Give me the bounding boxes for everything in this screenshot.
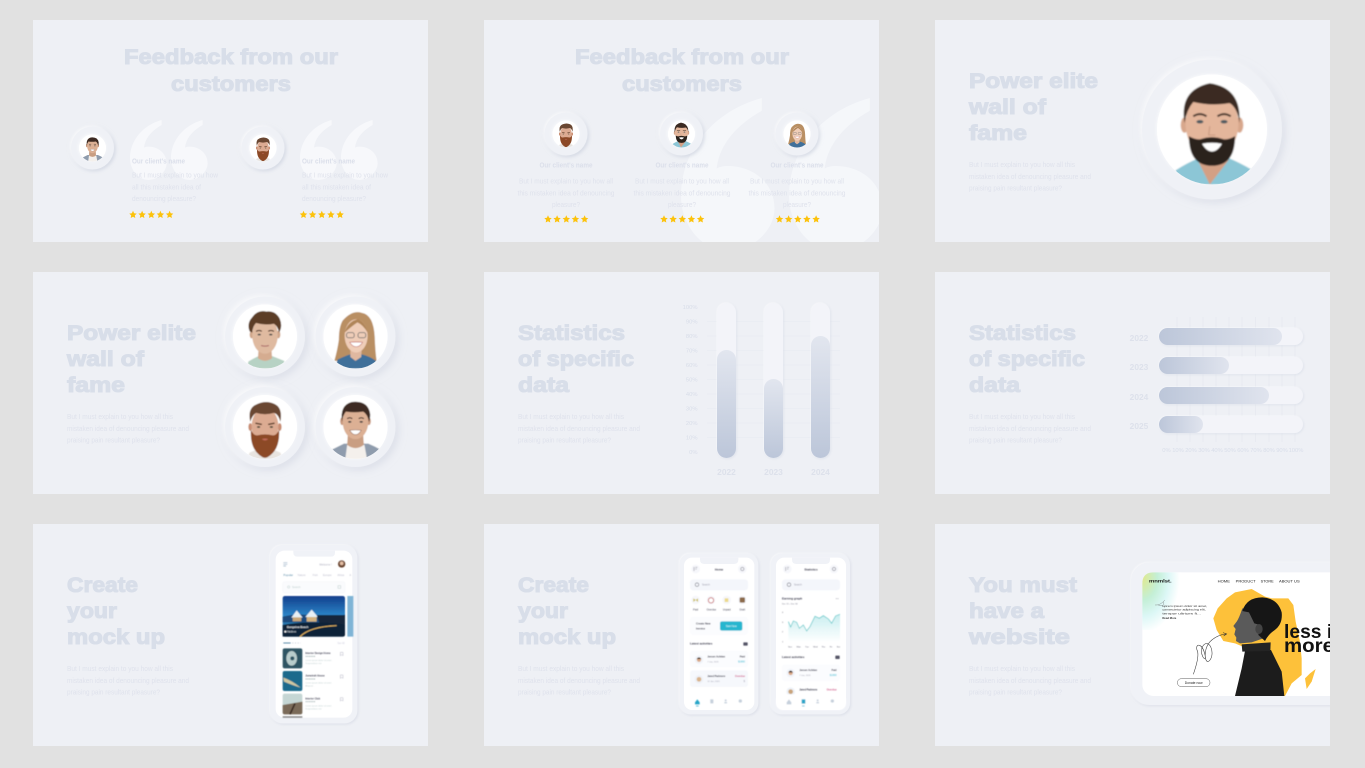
intro paragraph (1155, 600, 1208, 620)
client text left: Our client's name (540, 162, 593, 170)
body text: But I must explain to you how all this (969, 160, 1075, 169)
home screen content: Unpaid (723, 608, 731, 611)
client text left: pleasure? (552, 200, 580, 209)
app content: Welcome ! (319, 562, 332, 566)
panel: mock up two phones (484, 524, 879, 746)
heading: statistics: of specific (518, 347, 634, 371)
app content: Interior Club (305, 697, 321, 700)
body text: mistaken idea of denouncing pleasure and (67, 676, 189, 685)
statistics screen content: Wed (813, 646, 818, 648)
phone mockup: statistics screen (771, 553, 850, 714)
statistics screen content: Sun (788, 646, 793, 648)
client name and quote: all this mistaken idea of (132, 182, 201, 192)
panel: statistics horizontal bars (935, 272, 1330, 494)
statistics screen content: 2 (782, 632, 784, 634)
panel: statistics vertical bars (484, 272, 879, 494)
statistics screen content: Overdue (827, 688, 837, 691)
heading: power elite: wall of (968, 95, 1047, 119)
statistics screen content: 3 (782, 622, 784, 624)
axis labels: 40% (1211, 448, 1223, 454)
app content: Maldives (287, 631, 297, 633)
bar 2024: 2024 (811, 467, 830, 477)
statistics screen content: Search (794, 584, 802, 587)
site navigation: PRODUCT (1236, 579, 1257, 583)
hero words: less is (1284, 622, 1343, 643)
axis labels: 100% (683, 305, 698, 311)
bar 2023: 2023 (1130, 362, 1149, 372)
heading: create mock up: your (518, 599, 569, 623)
body text: But I must explain to you how all this (969, 664, 1075, 673)
statistics screen content: Sat (837, 645, 840, 648)
intro paragraph: consectetur adipiscing elit, (1162, 609, 1206, 612)
website mockup (1142, 572, 1330, 706)
home screen content: Search (702, 584, 710, 587)
body text: praising pain resultant pleasure? (969, 184, 1062, 192)
body text: But I must explain to you how all this (518, 412, 624, 421)
app content: See All (337, 642, 345, 645)
body text (67, 412, 189, 444)
app content: Aliquam (305, 685, 313, 688)
panel: website mock up (935, 524, 1365, 746)
bar 2023: 2023 (764, 467, 783, 477)
home screen content: Start Now (726, 625, 737, 628)
heading: you must have a website: You must (969, 573, 1077, 597)
statistics screen content: 7 Jan, 2021 (799, 675, 811, 677)
axis labels: 0% (689, 450, 698, 456)
site navigation: mnmlst. (1149, 579, 1172, 584)
statistics screen content: Earning graph (782, 597, 802, 601)
bar 2024: 2024 (1130, 392, 1149, 402)
client name and quote (132, 158, 219, 203)
client text middle: Our client's name (656, 162, 709, 170)
panel: feedback two clients (33, 20, 428, 242)
heading: statistics: data (518, 373, 570, 397)
donate button: Donate now (1185, 681, 1203, 685)
bar chart: horizontal (1130, 317, 1303, 454)
app content: Bungalow Beach (287, 625, 309, 629)
star rating (129, 211, 173, 218)
body text (518, 664, 640, 696)
curly arrow (1193, 633, 1227, 674)
portrait: red bearded man (233, 395, 308, 470)
body text: praising pain resultant pleasure? (67, 436, 160, 444)
client text middle (634, 162, 731, 209)
axis labels: 30% (686, 406, 698, 412)
body text: praising pain resultant pleasure? (969, 688, 1062, 696)
client text middle: this mistaken idea of denouncing (634, 188, 731, 198)
avatar left (552, 120, 590, 158)
icon: large quote marks (681, 98, 882, 251)
client card middle (634, 112, 731, 222)
heading: statistics: of specific (969, 347, 1085, 371)
heading: feedback: customers (622, 72, 742, 96)
axis labels: 70% (686, 348, 698, 354)
axis labels: 100% (1289, 448, 1303, 454)
axis labels: 50% (686, 378, 698, 384)
axis labels: 30% (1198, 448, 1210, 454)
client text right: pleasure? (783, 200, 811, 209)
statistics screen content: Jared Padmore (799, 688, 818, 691)
axis labels: 20% (1185, 448, 1197, 454)
heading: power elite: Power elite (67, 321, 196, 345)
app content: Search (292, 585, 301, 589)
heading: feedback: customers (171, 72, 291, 96)
site navigation (1149, 579, 1300, 582)
heading: feedback: Feedback from our (575, 45, 790, 69)
bar 2024 (1130, 387, 1303, 404)
star rating (300, 211, 344, 218)
icon: quote mark 1 (130, 120, 208, 180)
avatar 2 (250, 134, 287, 172)
map of Africa (1213, 589, 1316, 696)
axis labels: 80% (1263, 448, 1275, 454)
home screen content: $1800 (738, 661, 746, 664)
app content: Popular (283, 573, 293, 577)
client text left: But I must explain to you how all (519, 176, 613, 186)
client name and quote: denouncing pleasure? (302, 194, 366, 203)
axis labels: 60% (686, 363, 698, 369)
app content: Nature (298, 573, 306, 577)
person in profile (1233, 597, 1284, 696)
client card right (748, 112, 846, 222)
client name and quote: denouncing pleasure? (132, 194, 196, 203)
home screen content: 7 Jan, 2021 (707, 662, 719, 664)
heading: create mock up: mock up (518, 625, 616, 649)
home screen content: Paid (740, 656, 745, 659)
client text right (748, 162, 846, 209)
body text: mistaken idea of denouncing pleasure and (518, 676, 640, 685)
portrait: man in grey jacket (324, 395, 399, 470)
heading: create mock up (518, 573, 616, 649)
home screen content: $ (744, 680, 746, 683)
body text: praising pain resultant pleasure? (518, 436, 611, 444)
heading: create mock up: Create (518, 573, 589, 597)
app content: Suspendisse nisi (305, 708, 322, 710)
heading: create mock up: mock up (67, 625, 165, 649)
heading: create mock up: Create (67, 573, 138, 597)
phone mockup: travel app (270, 545, 357, 723)
body text: But I must explain to you how all this (518, 664, 624, 673)
star rating (660, 215, 704, 222)
body text: mistaken idea of denouncing pleasure and (969, 172, 1091, 181)
client name and quote: But I must explain to you how (132, 170, 219, 180)
body text: mistaken idea of denouncing pleasure and (969, 676, 1091, 685)
avatar 1 (79, 134, 116, 172)
statistics screen content: Dec 15 - Dec 30 (782, 604, 798, 606)
statistics screen content (776, 565, 846, 710)
body text (518, 412, 640, 444)
panel: mock up one phone (33, 524, 428, 746)
heading: you must have a website: website (968, 625, 1070, 649)
client text right: Our client's name (770, 162, 824, 170)
heading: statistics (969, 321, 1085, 397)
statistics screen content: $1800 (830, 674, 837, 677)
phone mockup: home screen (679, 553, 758, 714)
star rating (776, 215, 820, 222)
axis labels (683, 305, 698, 456)
axis labels: 90% (1276, 448, 1288, 454)
app content: Lorem ipsum dolor sit amet (305, 704, 332, 707)
bar 2022: 2022 (1130, 333, 1149, 343)
axis labels: 10% (686, 436, 698, 442)
client name and quote: But I must explain to you how (302, 170, 389, 180)
body text (969, 664, 1091, 696)
statistics screen content: Tue (805, 646, 810, 648)
heading: power elite: fame (67, 373, 125, 397)
intro paragraph: Read More (1162, 617, 1177, 620)
panel: feedback three clients (484, 20, 882, 251)
portrait: blonde woman (324, 304, 399, 380)
app content: Suspendisse nisi (305, 663, 322, 665)
client name and quote: all this mistaken idea of (302, 182, 371, 192)
heading: statistics (518, 321, 634, 397)
axis labels (1162, 448, 1303, 454)
body text: But I must explain to you how all this (67, 664, 173, 673)
bar 2025 (1130, 416, 1303, 433)
body text: praising pain resultant pleasure? (969, 436, 1062, 444)
body text (67, 664, 189, 696)
statistics screen content: Mon (797, 646, 802, 648)
home screen content: Invoice (696, 626, 706, 630)
axis labels: 20% (686, 421, 698, 427)
body text: But I must explain to you how all this (969, 412, 1075, 421)
app content: A (349, 573, 351, 577)
heading: power elite: Power elite (969, 69, 1098, 93)
statistics screen content: Thu (821, 646, 826, 648)
client name and quote: Our client's name (132, 158, 185, 166)
home screen content: Jeroen Achtien (707, 656, 726, 659)
home screen content: Draft (740, 608, 745, 611)
bar 2022: 2022 (717, 467, 736, 477)
statistics screen content: 4 (782, 612, 784, 614)
heading: feedback (124, 45, 339, 96)
statistics screen content: Jeroen Achtien (799, 669, 818, 672)
heading: feedback: Feedback from our (124, 45, 339, 69)
home screen content: Overdue (735, 675, 746, 678)
statistics screen content: Paid (831, 669, 837, 672)
body text: But I must explain to you how all this (67, 412, 173, 421)
heading: create mock up: your (67, 599, 118, 623)
heading: power elite (66, 321, 196, 397)
client name and quote (302, 158, 389, 203)
axis labels: 10% (1172, 448, 1184, 454)
home screen content: Home (715, 567, 723, 571)
client text right: this mistaken idea of denouncing (748, 188, 846, 198)
client name and quote: Our client's name (302, 158, 355, 166)
client card left (518, 112, 615, 222)
axis labels: 80% (686, 334, 698, 340)
heading: statistics: data (969, 373, 1021, 397)
body text (969, 412, 1091, 444)
axis labels: 40% (686, 392, 698, 398)
axis labels: 0% (1162, 448, 1171, 454)
site navigation: ABOUT US (1279, 579, 1300, 583)
home screen content: Overdue (707, 608, 717, 611)
heading: you must have a website (968, 573, 1077, 649)
app content: Europe (323, 573, 332, 577)
statistics screen content: 1 (782, 641, 784, 643)
heading: feedback (575, 45, 790, 96)
portrait: smiling bearded man (1157, 74, 1286, 203)
client text left: this mistaken idea of denouncing (518, 188, 615, 198)
home screen content: Paid (693, 608, 699, 611)
heading: power elite: fame (969, 121, 1027, 145)
app content: Lorem ipsum dolor sit amet (305, 659, 332, 662)
axis labels: 90% (686, 320, 698, 326)
app content: Interior Design Home (305, 652, 331, 655)
intro paragraph: Lorem ipsum dolor sit amet, (1162, 605, 1208, 608)
heading: you must have a website: have a (969, 599, 1045, 623)
home screen content: Create New (696, 621, 711, 625)
heading: create mock up (67, 573, 165, 649)
home screen content: 12 Jan, 2021 (707, 681, 721, 683)
client text right: But I must explain to you how all (750, 176, 844, 186)
axis labels: 60% (1237, 448, 1249, 454)
body text: mistaken idea of denouncing pleasure and (518, 424, 640, 433)
star rating (544, 215, 588, 222)
heading: statistics: Statistics (518, 321, 625, 345)
bar chart: vertical (683, 303, 840, 477)
app content: Lorem ipsum dolor sit amet (305, 682, 332, 685)
home screen content (690, 565, 748, 706)
avatar right (784, 120, 821, 158)
home screen content: Latest activities (690, 642, 713, 646)
axis labels: 70% (1250, 448, 1262, 454)
client text middle: pleasure? (668, 200, 696, 209)
panel: wall of fame four (33, 272, 428, 494)
site navigation: HOME (1218, 579, 1231, 583)
statistics screen content: Latest activities (782, 655, 805, 659)
axis labels: 50% (1224, 448, 1236, 454)
home screen content: Jared Padmore (707, 675, 726, 678)
panel: wall of fame single (935, 20, 1330, 242)
body text (969, 160, 1091, 192)
heading: power elite (968, 69, 1098, 145)
icon: quote mark 2 (300, 120, 378, 180)
body text: praising pain resultant pleasure? (518, 688, 611, 696)
bar 2023 (764, 303, 783, 477)
avatar middle (668, 120, 706, 158)
site navigation: STORE (1261, 579, 1274, 583)
client text left (518, 162, 615, 209)
statistics screen content: Fri (830, 645, 833, 648)
client card 1 (71, 120, 219, 218)
body text: mistaken idea of denouncing pleasure and (969, 424, 1091, 433)
heading: power elite: wall of (66, 347, 145, 371)
app content: Jumeirah House (305, 675, 325, 678)
intro paragraph: tempor ultrices ft... (1162, 612, 1202, 615)
app content: Africa (337, 573, 345, 577)
body text: praising pain resultant pleasure? (67, 688, 160, 696)
bar 2022 (717, 303, 736, 477)
app content: Fish (313, 573, 318, 577)
bar 2022 (1130, 328, 1303, 345)
bar 2025: 2025 (1130, 421, 1149, 431)
statistics screen content: Statistics (804, 567, 818, 571)
phone notch (293, 551, 335, 557)
bar 2023 (1130, 357, 1303, 374)
app content (283, 560, 353, 718)
donate button (1177, 679, 1210, 687)
heading: statistics: Statistics (969, 321, 1076, 345)
client card 2 (242, 120, 389, 218)
portrait: curly haired man (233, 304, 308, 380)
client text middle: But I must explain to you how all (635, 176, 729, 186)
body text: mistaken idea of denouncing pleasure and (67, 424, 189, 433)
bar 2024 (811, 303, 830, 477)
website mockup: more (1284, 636, 1334, 657)
